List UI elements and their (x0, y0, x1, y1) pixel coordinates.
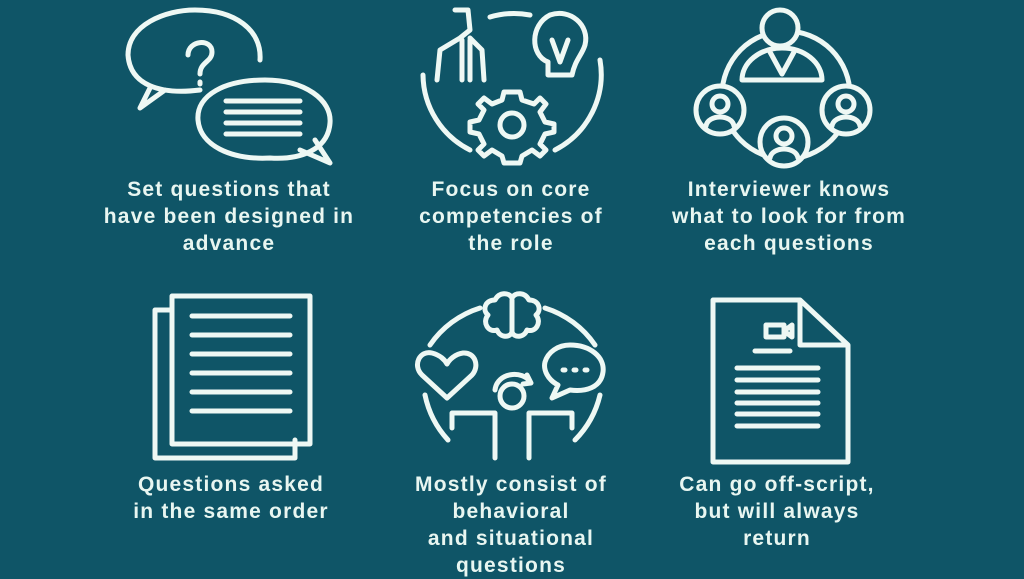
text: set questions: advance (183, 232, 275, 255)
text: interviewer: Interviewer knows (688, 178, 890, 201)
text: same order: Questions asked (138, 473, 324, 496)
icon: competencies circle (423, 10, 601, 163)
text: interviewer: what to look for from (672, 205, 906, 228)
text: behavioral: Mostly consist of (415, 473, 607, 496)
text: behavioral (415, 473, 607, 577)
text: set questions: have been designed in (104, 205, 354, 228)
text: same order (133, 473, 329, 523)
icon: interviewer with candidates (696, 10, 870, 166)
text: off-script: Can go off-script, (679, 473, 875, 496)
text: interviewer (672, 178, 906, 255)
text: focus (419, 178, 603, 255)
text: set questions: Set questions that (127, 178, 331, 201)
text: behavioral: behavioral (452, 500, 570, 523)
text: focus: Focus on core (431, 178, 591, 201)
text: behavioral: questions (456, 554, 566, 577)
icon: behavioral circle (417, 294, 603, 458)
text: same order: in the same order (133, 500, 329, 523)
icon: stacked documents (155, 296, 310, 458)
text: set questions (104, 178, 354, 255)
icon: document with camera (713, 300, 848, 462)
text: behavioral: and situational (428, 527, 594, 550)
text: focus: the role (468, 232, 554, 255)
text: focus: competencies of (419, 205, 603, 228)
text: off-script: return (743, 527, 811, 550)
text: off-script (679, 473, 875, 550)
text: interviewer: each questions (704, 232, 874, 255)
text: off-script: but will always (694, 500, 860, 523)
icon: speech bubbles (128, 10, 330, 163)
